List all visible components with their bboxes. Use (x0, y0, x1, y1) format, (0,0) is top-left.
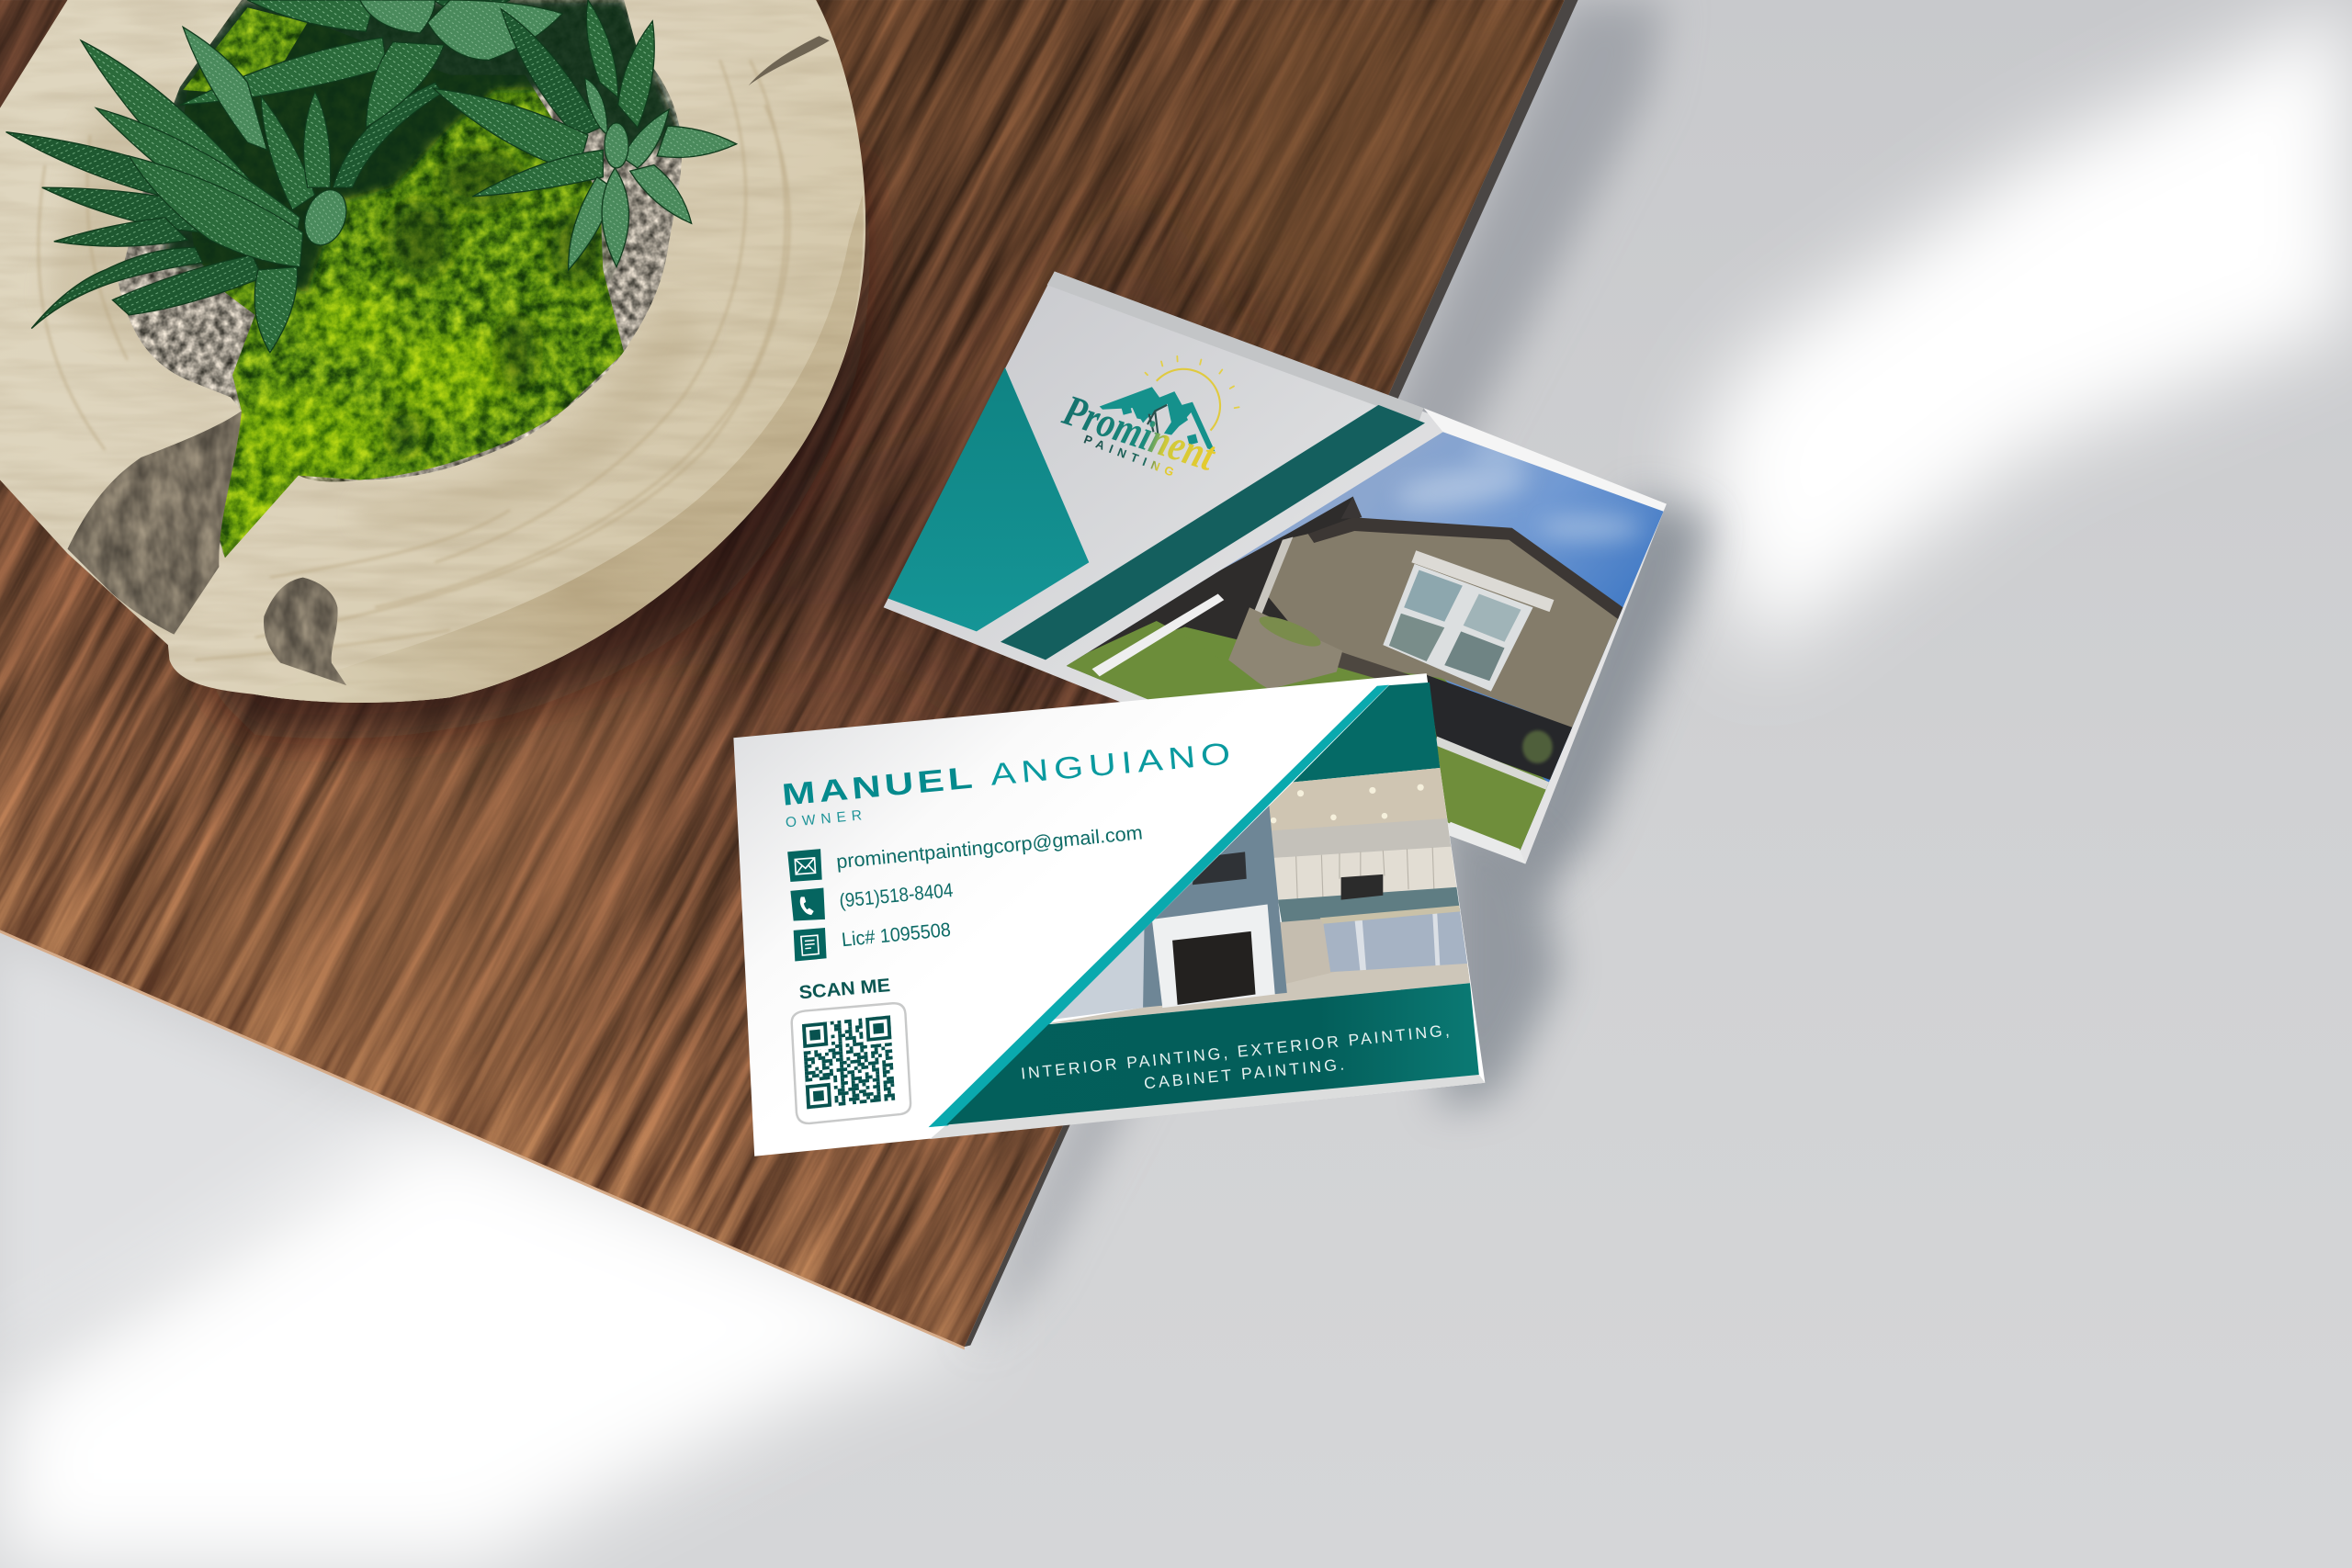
pillar (1254, 537, 1293, 615)
back of business card (884, 272, 1680, 870)
island posts (1354, 910, 1440, 975)
top moss patch (183, 7, 308, 93)
succulent rosette: left (6, 27, 331, 353)
bowl wood texture (0, 0, 865, 703)
logo: Prominent Painting (1057, 356, 1239, 481)
board front edge (0, 925, 965, 1349)
icon: envelope (787, 849, 822, 882)
name: Anguiano: ANGUIANO (989, 737, 1238, 793)
house photo (1050, 420, 1680, 870)
bottom card strip (1444, 822, 1525, 863)
blue wall (1080, 773, 1287, 1008)
roof (1308, 517, 1623, 619)
roof gable (1341, 496, 1362, 519)
front of business card (733, 673, 1485, 1156)
small house windows (1121, 404, 1198, 445)
wall trim (1313, 645, 1582, 747)
license number: Lic# 1095508 (841, 919, 952, 951)
cavity with gravel (105, 0, 705, 570)
shrubs (1427, 675, 1577, 783)
painter figure (1148, 405, 1167, 435)
moss bright clumps (225, 289, 513, 549)
tv on wall (1193, 852, 1247, 885)
moss (180, 7, 624, 558)
grass right (1435, 745, 1548, 855)
logo wordmark: Prominent (1057, 386, 1222, 481)
light band: top right (1695, 0, 2352, 660)
QR code (802, 1015, 895, 1109)
mantel (1152, 905, 1275, 1008)
countertop (1320, 905, 1473, 924)
services tagline line 1: INTERIOR PAINTING, EXTERIOR PAINTING, (1020, 1021, 1453, 1083)
wood board (0, 0, 1656, 1423)
teal diagonal accent (929, 685, 1389, 1127)
kitchen island (1323, 908, 1476, 972)
board surface (0, 0, 1565, 1347)
clouds (1393, 441, 1643, 540)
backsplash (1278, 886, 1467, 927)
QR card (792, 1003, 910, 1123)
shade next to board left (0, 945, 435, 1349)
bottom teal banner (946, 983, 1479, 1125)
sidewalk (1435, 737, 1551, 792)
range hood (1341, 874, 1383, 900)
bark patch (67, 411, 242, 635)
firebox (1172, 931, 1256, 1005)
email: prominentpaintingcorp@gmail.com (835, 822, 1144, 873)
sky (1050, 420, 1680, 870)
ceiling lights (1271, 784, 1424, 823)
card top edge shade (1047, 272, 1423, 422)
wood board cast shadow (975, 0, 1665, 1347)
card top edge bright part (1423, 408, 1667, 514)
bowl outer side (255, 195, 864, 703)
moss dark crevices (387, 153, 605, 459)
succulent center bud (298, 184, 354, 251)
roofs (1100, 387, 1215, 451)
dark diagonal band (1001, 405, 1425, 660)
front card cast shadow (1440, 780, 1560, 1110)
card base (884, 272, 1667, 863)
icon: license document (794, 928, 827, 962)
lawn base (1059, 626, 1560, 855)
upper wall (1268, 818, 1467, 861)
logo subtitle: PAINTING (1082, 432, 1181, 481)
window frame (1383, 564, 1533, 692)
sun rays (1146, 356, 1239, 408)
kitchen base (1278, 906, 1477, 993)
teal corner shape (888, 367, 1089, 631)
floor (1043, 963, 1477, 1024)
planter: driftwood bowl with moss and succulents (0, 0, 870, 739)
window awning (1411, 550, 1554, 612)
shade beneath leaves (165, 0, 684, 292)
name: Manuel: MANUEL (781, 761, 978, 813)
sun ring (1157, 369, 1220, 431)
services tagline line 2: CABINET PAINTING. (1143, 1055, 1348, 1092)
back card cast shadow (1500, 495, 1710, 900)
succulent rosette: top (180, 0, 562, 187)
icon: phone (790, 888, 825, 920)
job title: OWNER (785, 807, 867, 830)
bowl growth rings (39, 60, 789, 660)
porch in shadow (1050, 496, 1362, 675)
phone number: (951)518-8404 (839, 880, 954, 912)
upper cabinets (1273, 846, 1464, 901)
board right edge (965, 0, 1578, 1347)
kitchen photo (1043, 758, 1477, 1024)
white diagonal strip in photo (1092, 594, 1224, 676)
cabinet door lines (1296, 847, 1434, 900)
bowl crack (749, 36, 830, 85)
ceiling (1268, 758, 1463, 834)
window panes (1389, 570, 1521, 681)
bowl body (0, 0, 865, 703)
grass left (1059, 621, 1275, 705)
light band: bottom left (0, 1110, 990, 1567)
card base (733, 673, 1485, 1156)
bowl inner shading (45, 75, 705, 527)
bowl shadow on wood (195, 135, 870, 739)
light wall (1050, 915, 1145, 1020)
bark knot (264, 578, 346, 685)
planter bush (1256, 611, 1324, 652)
house wall (1264, 528, 1620, 732)
succulent rosette: right (434, 0, 737, 270)
planter box (1228, 607, 1342, 690)
card bottom strip (930, 1075, 1485, 1139)
top teal triangle (1293, 682, 1440, 782)
scan me label: SCAN ME (798, 976, 891, 1003)
